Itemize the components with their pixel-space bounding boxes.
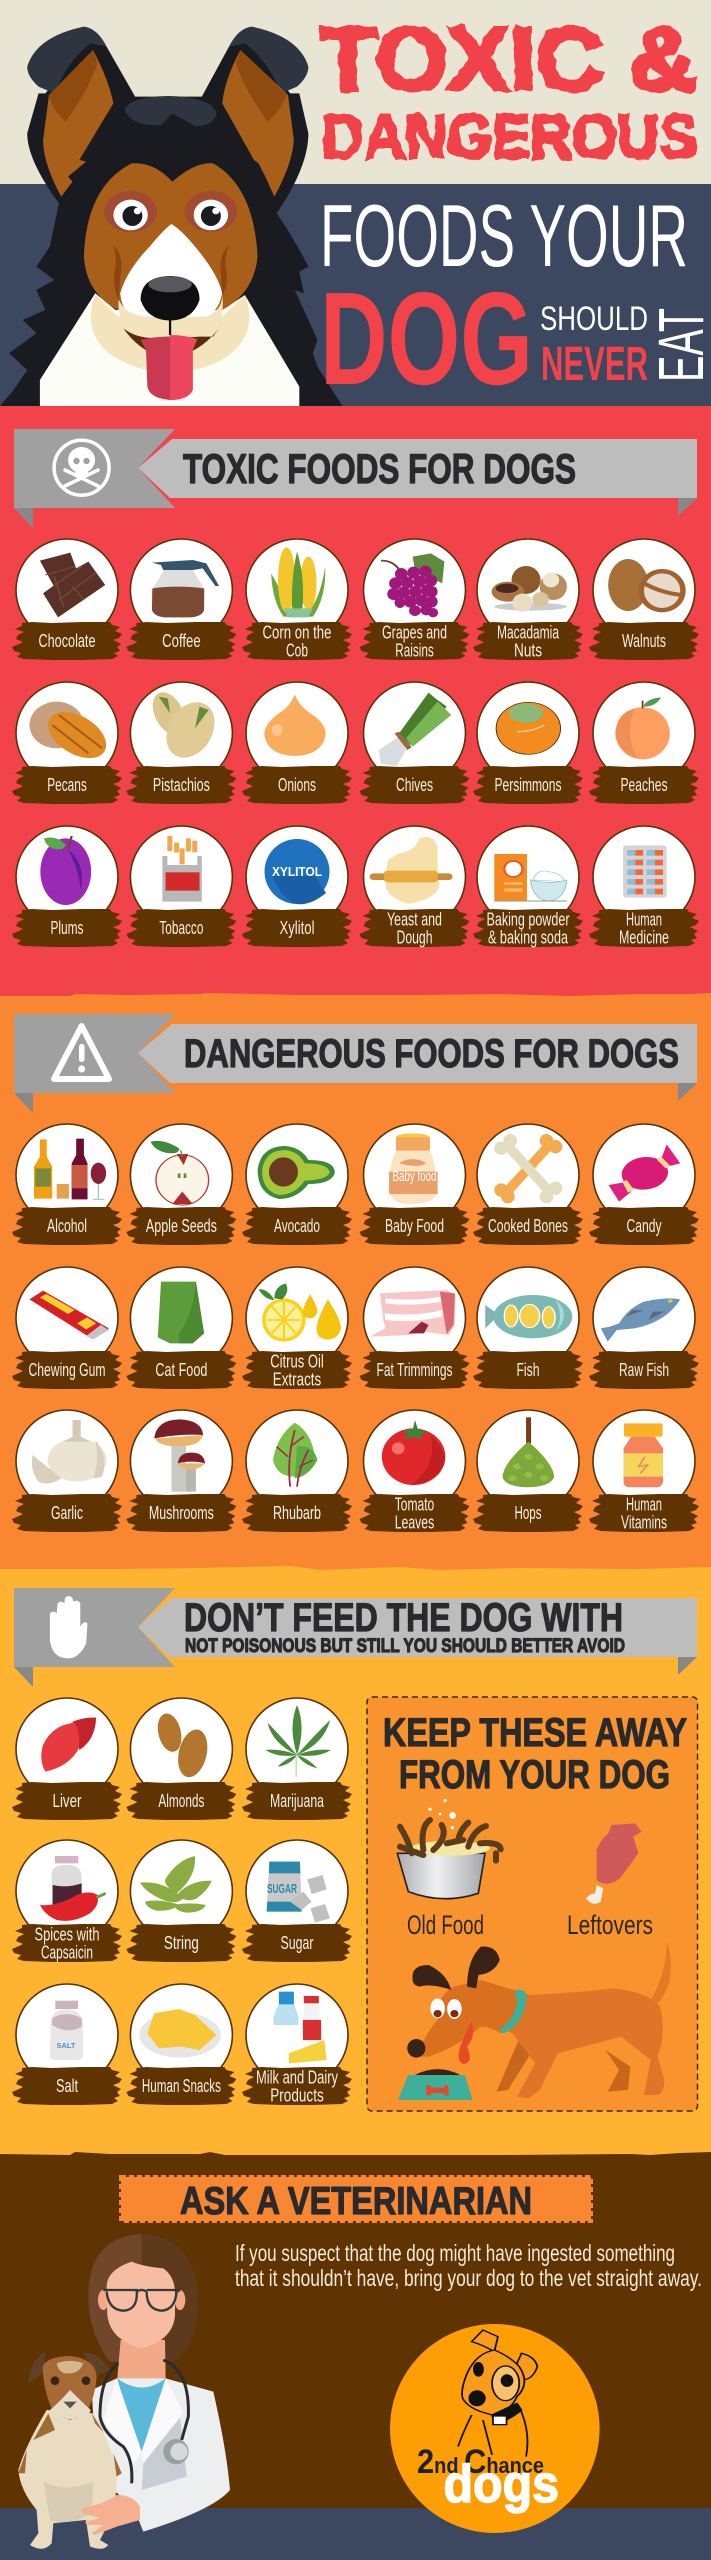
card: Human Snacks	[126, 1984, 236, 2105]
card: Persimmons	[473, 682, 583, 804]
icon: onion	[264, 694, 326, 756]
callout: keep these away	[367, 1697, 698, 2111]
icon: apple half	[151, 1141, 209, 1205]
label: Chives	[396, 775, 433, 795]
icon: fish with lemon	[485, 1295, 572, 1338]
icon: marijuana leaf	[265, 1705, 331, 1777]
title: should: SHOULD	[540, 300, 648, 338]
icon: baby food jar	[389, 1133, 438, 1204]
logo text: dogs: dogs	[444, 2455, 559, 2514]
icon: raw fish	[601, 1298, 680, 1342]
label: Human Snacks	[142, 2076, 221, 2096]
icon: alcohol bottles	[34, 1139, 106, 1199]
label: Sugar	[280, 1933, 314, 1953]
icon: logo dog	[458, 2330, 537, 2457]
icon: baking soda box and bowl	[494, 854, 567, 901]
icon: pill blister	[623, 845, 667, 898]
label: Alcohol	[47, 1216, 87, 1236]
banner: dangerous foods heading	[14, 1014, 697, 1113]
label: Medicine	[619, 928, 669, 948]
label: Nuts	[514, 640, 542, 660]
label: Salt	[56, 2076, 78, 2096]
label: Almonds	[158, 1791, 204, 1811]
card: Pistachios	[126, 682, 236, 804]
icon: macadamia nuts	[492, 566, 567, 612]
card: Grapes and Raisins	[360, 539, 470, 660]
icon: plate of chips	[139, 2009, 221, 2058]
card: Macadamia Nuts	[473, 539, 583, 660]
icon: salt shaker: SALT	[56, 2041, 76, 2050]
icon: cigarette pack	[162, 836, 202, 902]
icon: corn	[271, 547, 325, 617]
label: & baking soda	[488, 928, 569, 948]
heading: TOXIC FOODS FOR DOGS	[183, 445, 576, 492]
label: Avocado	[274, 1216, 320, 1236]
icon: sugar bag and cubes: SUGAR	[267, 1881, 297, 1896]
icon: dough and rolling pin	[370, 837, 453, 904]
label: String	[164, 1933, 199, 1953]
label: Garlic	[51, 1503, 83, 1523]
icon: coffee pot	[152, 560, 219, 617]
card: Sugar	[242, 1840, 352, 1962]
label: Marijuana	[270, 1791, 325, 1811]
card: Raw Fish	[589, 1267, 699, 1389]
card: Almonds	[126, 1698, 236, 1820]
label: Pecans	[47, 775, 87, 795]
label: Hops	[514, 1503, 542, 1523]
label: Baking powder	[486, 910, 570, 930]
label: Mushrooms	[149, 1503, 214, 1523]
panel: ask a veterinarian	[0, 2152, 711, 2560]
panel: header	[0, 0, 711, 412]
card: Cooked Bones	[473, 1124, 583, 1245]
text block: advice	[235, 2240, 702, 2291]
icon: liver	[41, 1717, 96, 1772]
card: Cat Food	[126, 1267, 236, 1389]
card: Chives	[360, 682, 470, 804]
label: Citrus Oil	[270, 1352, 324, 1372]
icon: tomato	[382, 1420, 445, 1485]
icon: pistachios	[147, 690, 222, 762]
icon: plum	[40, 836, 91, 905]
label: Chewing Gum	[28, 1360, 106, 1380]
icon: chives	[379, 693, 451, 766]
card: Salt	[12, 1984, 122, 2105]
label: Spices with	[34, 1924, 100, 1944]
label: Capsaicin	[41, 1942, 93, 1962]
label: Grapes and	[382, 622, 447, 642]
label: Raw Fish	[619, 1360, 669, 1380]
icon: stop hand	[50, 1596, 88, 1658]
label: Tobacco	[159, 918, 203, 938]
label: Leaves	[395, 1512, 434, 1532]
label: Fat Trimmings	[376, 1360, 452, 1380]
card: Coffee	[126, 539, 236, 660]
label: Vitamins	[621, 1512, 667, 1532]
card: Mushrooms	[126, 1410, 236, 1532]
card: Spices with Capsaicin	[12, 1840, 122, 1962]
card: Plums	[12, 826, 122, 947]
panel: toxic foods	[0, 406, 711, 998]
label: Pistachios	[153, 775, 210, 795]
banner: toxic foods heading	[14, 429, 697, 528]
label: Coffee	[162, 631, 201, 651]
banner: don't feed heading	[14, 1588, 697, 1687]
icon: crossed bones	[494, 1134, 562, 1203]
card: Tobacco	[126, 826, 236, 947]
title: never: NEVER	[541, 338, 648, 391]
card: Yeast and Dough	[360, 826, 470, 948]
card: String	[126, 1840, 236, 1962]
panel: dangerous foods	[0, 993, 711, 1570]
card: Tomato Leaves	[360, 1410, 470, 1532]
card: Baking powder & baking soda	[473, 826, 583, 948]
card: Baby Food	[360, 1124, 470, 1245]
icon: citrus and oil drops	[258, 1283, 341, 1342]
icon: walnuts	[608, 559, 686, 612]
label: Onions	[278, 775, 316, 795]
card: Onions	[242, 682, 352, 804]
card: Xylitol	[242, 826, 352, 947]
label: Baby Food	[385, 1216, 444, 1236]
icon: leftover drumstick	[586, 1823, 642, 1904]
icon: almonds	[155, 1712, 211, 1779]
label: Human	[626, 910, 662, 930]
icon: hops	[502, 1417, 554, 1487]
panel: don't feed the dog	[0, 1566, 711, 2158]
card: Candy	[589, 1124, 699, 1245]
label: Macadamia	[497, 622, 560, 642]
logo: 2nd Chance Dogs	[390, 2324, 600, 2533]
label: Products	[270, 2086, 324, 2106]
label: Corn on the	[262, 622, 332, 642]
label: Cooked Bones	[488, 1216, 568, 1236]
card: Liver	[12, 1698, 122, 1820]
icon: cat food bag	[158, 1282, 204, 1343]
icon: rhubarb	[273, 1423, 317, 1487]
label: Yeast and	[387, 910, 442, 930]
card: Milk and Dairy Products	[242, 1984, 352, 2106]
label: Extracts	[273, 1370, 321, 1390]
card: Peaches	[589, 682, 699, 804]
label: Human	[626, 1494, 662, 1514]
icon: bacon fat	[370, 1290, 456, 1337]
card: Apple Seeds	[126, 1124, 236, 1245]
card: Citrus Oil Extracts	[242, 1267, 352, 1390]
label: Xylitol	[280, 918, 314, 938]
card: Hops	[473, 1410, 583, 1532]
icon: milk and cheese	[273, 1992, 327, 2063]
card: Fat Trimmings	[360, 1267, 470, 1389]
card: Marijuana	[242, 1698, 352, 1820]
icon: persimmon	[496, 702, 561, 754]
card: Human Vitamins	[589, 1410, 699, 1532]
card: Garlic	[12, 1410, 122, 1532]
card: Alcohol	[12, 1124, 122, 1245]
logo text: 2nd Chance: 2nd Chance	[417, 2443, 544, 2481]
card: Baby Food: Baby food	[392, 1168, 436, 1185]
icon: chocolate	[40, 553, 105, 617]
label: Tomato	[395, 1494, 434, 1514]
label: Peaches	[620, 775, 668, 795]
label: Apple Seeds	[146, 1216, 217, 1236]
icon: grapes	[381, 553, 444, 617]
card: Corn on the Cob	[242, 539, 352, 660]
heading: ask a veterinarian: ASK A VETERINARIAN	[180, 2180, 532, 2223]
illustration: veterinarian with dog	[18, 2234, 230, 2549]
label: leftovers: Leftovers	[567, 1910, 653, 1940]
card: Pecans	[12, 682, 122, 804]
card: Fish	[473, 1267, 583, 1389]
label: Walnuts	[622, 631, 666, 651]
icon: garlic	[32, 1420, 107, 1484]
label: Cat Food	[155, 1360, 207, 1380]
label: old food: Old Food	[407, 1910, 484, 1940]
label: Dough	[396, 928, 432, 948]
label: Liver	[52, 1791, 82, 1811]
card: Walnuts	[589, 539, 699, 660]
icon: old food bucket	[397, 1799, 501, 1899]
label: Chocolate	[38, 631, 96, 651]
title: Toxic &: TOXIC &	[320, 10, 696, 110]
icon: candy	[609, 1144, 680, 1202]
card: Human Medicine	[589, 826, 699, 948]
icon: warning triangle	[54, 1026, 109, 1079]
label: Fish	[516, 1360, 540, 1380]
card: Chocolate	[12, 539, 122, 660]
card: Rhubarb	[242, 1410, 352, 1532]
label: Milk and Dairy	[256, 2068, 338, 2088]
label: Rhubarb	[273, 1503, 321, 1523]
illustration: dog at bowl	[398, 1942, 671, 2100]
icon: xylitol badge: XYLITOL	[272, 864, 322, 879]
illustration: collie dog face	[0, 27, 342, 406]
label: Candy	[626, 1216, 662, 1236]
label: Raisins	[395, 640, 434, 660]
title: Dog: DOG	[320, 265, 533, 412]
icon: vitamin bottle	[624, 1423, 663, 1487]
icon: string beans	[140, 1856, 212, 1913]
icon: avocado	[258, 1146, 335, 1199]
icon: spice jar and chili	[40, 1856, 106, 1921]
icon: mushrooms	[154, 1419, 205, 1492]
label: Cob	[286, 640, 308, 660]
label: Persimmons	[494, 775, 562, 795]
icon: peach	[615, 697, 670, 759]
card: Avocado	[242, 1124, 352, 1245]
icon: chewing gum	[29, 1291, 109, 1339]
card: Chewing Gum	[12, 1267, 122, 1389]
label: Plums	[50, 918, 84, 938]
icon: pecans	[29, 702, 118, 766]
icon: skull and crossbones	[54, 440, 109, 495]
